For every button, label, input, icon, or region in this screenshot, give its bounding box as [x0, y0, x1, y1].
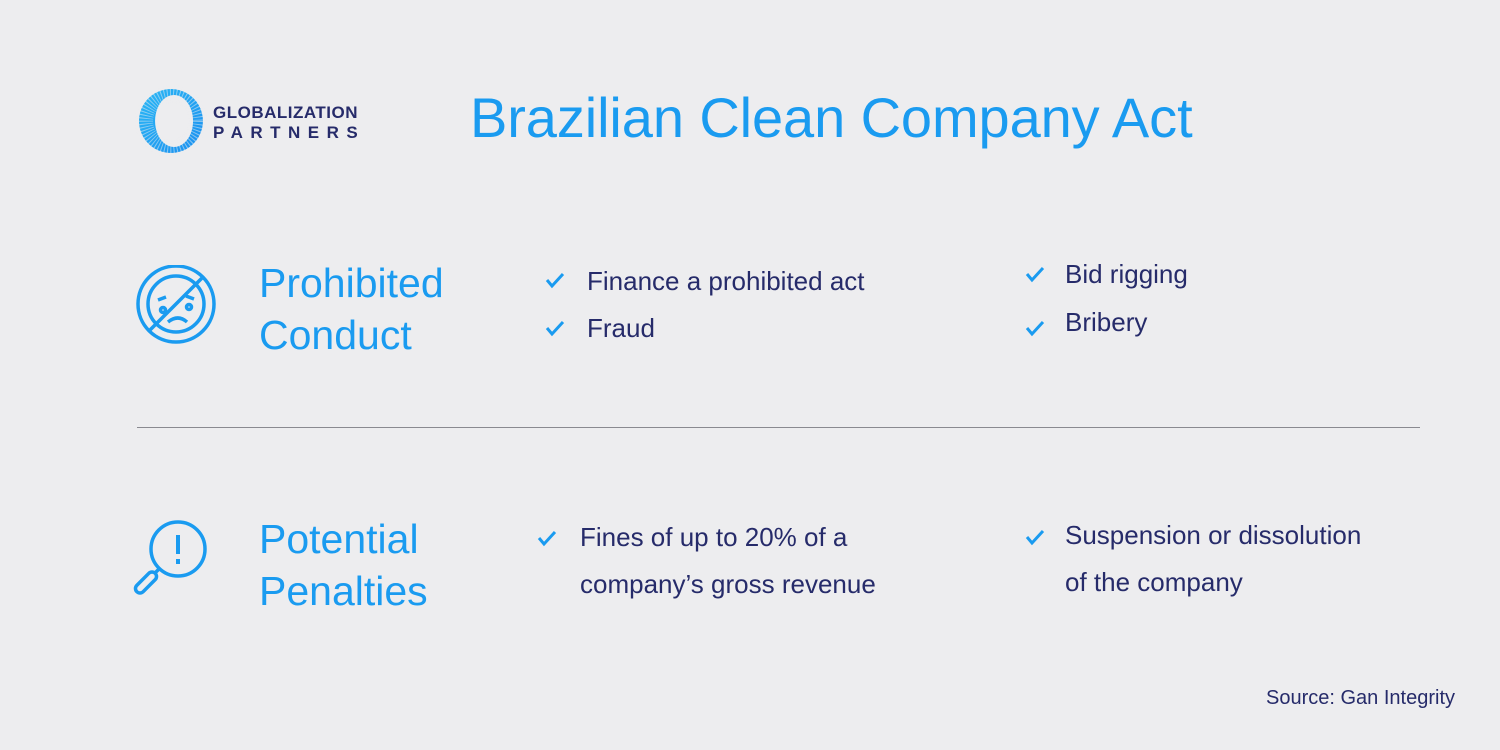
- logo text: [213, 103, 365, 142]
- source note: Source: Gan Integrity: [1266, 687, 1455, 709]
- list: penalties: [538, 520, 1361, 599]
- list: penalties: of the company: [1065, 567, 1243, 597]
- list: prohibited acts: Bid rigging: [1065, 259, 1188, 289]
- heading: potential penalties: Potential: [259, 516, 419, 562]
- list: prohibited acts: Bribery: [1065, 307, 1147, 337]
- heading: potential penalties: Penalties: [259, 568, 428, 614]
- list: prohibited acts: [546, 259, 1188, 343]
- logo: [138, 89, 365, 153]
- heading: prohibited conduct: Prohibited: [259, 260, 444, 306]
- panel: potential penalties: [134, 516, 1361, 614]
- icon: prohibited face: [136, 265, 216, 344]
- list: prohibited acts: Fraud: [587, 313, 655, 343]
- title: Brazilian Clean Company Act: [470, 86, 1193, 149]
- icon: magnifier: [134, 520, 207, 595]
- list: penalties: company’s gross revenue: [580, 569, 876, 599]
- heading: prohibited conduct: Conduct: [259, 312, 412, 358]
- logo text: GLOBALIZATION: [213, 103, 358, 122]
- heading: potential penalties: [259, 516, 428, 614]
- icon: logo ring: [138, 89, 203, 153]
- heading: prohibited conduct: [259, 260, 444, 358]
- panel: prohibited conduct: [136, 259, 1188, 358]
- logo text: PARTNERS: [213, 123, 365, 142]
- list: prohibited acts: Finance a prohibited act: [587, 266, 865, 296]
- list: penalties: Fines of up to 20% of a: [580, 522, 847, 552]
- list: penalties: Suspension or dissolution: [1065, 520, 1361, 550]
